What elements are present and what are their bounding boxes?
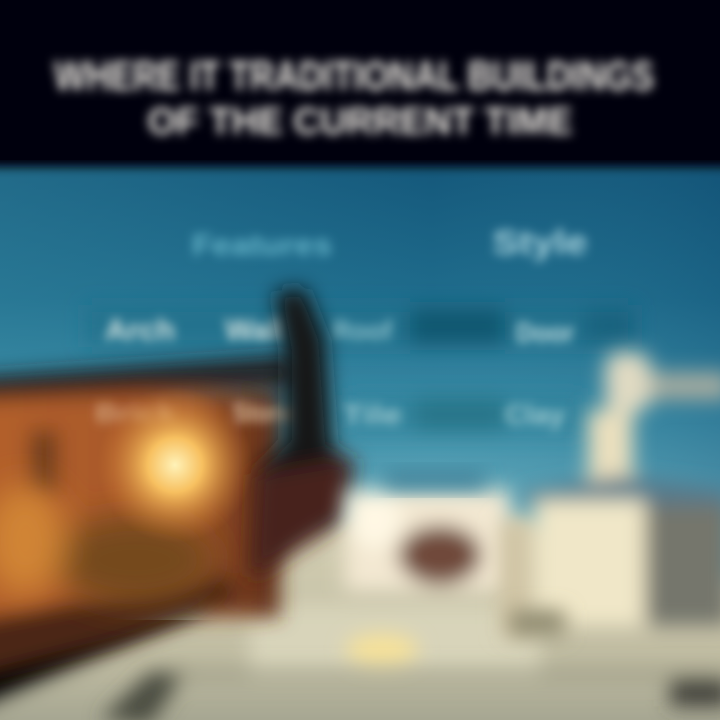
glowing lamp — [97, 387, 253, 543]
sky background — [0, 160, 720, 620]
roof — [0, 356, 300, 400]
dark shaded window — [30, 430, 58, 495]
row one labels: Roof — [332, 315, 393, 346]
right white tower — [500, 352, 720, 635]
panel: table text on sky — [85, 224, 635, 435]
table row shading — [85, 305, 635, 435]
center white arch — [345, 490, 510, 590]
row two labels: Clay — [505, 399, 565, 430]
dark tower silhouette — [250, 288, 355, 580]
ground highlight — [346, 610, 565, 666]
left building — [0, 356, 300, 680]
column headers: Style — [492, 224, 588, 262]
ground plaza — [0, 520, 720, 720]
row two labels: Tile — [342, 399, 402, 430]
row one labels — [105, 314, 574, 348]
foreground dark patches — [100, 668, 720, 720]
title: OF THE CURRENT TIME — [148, 101, 572, 143]
row one labels: Door — [516, 317, 574, 348]
tree shape — [0, 485, 215, 605]
wall labels on building: Stone — [232, 397, 298, 428]
row one labels: Wall — [225, 314, 285, 347]
building wall — [0, 392, 280, 617]
column headers — [192, 224, 588, 262]
title band — [0, 0, 720, 167]
column headers: Features — [192, 229, 332, 262]
wall labels on building: Brick — [95, 398, 176, 428]
dark lower-left foundation — [0, 572, 240, 680]
row one labels: Arch — [105, 314, 175, 347]
distant roofline — [385, 472, 485, 488]
title — [54, 52, 654, 143]
wall labels on building — [95, 397, 298, 428]
row two labels — [342, 399, 565, 430]
